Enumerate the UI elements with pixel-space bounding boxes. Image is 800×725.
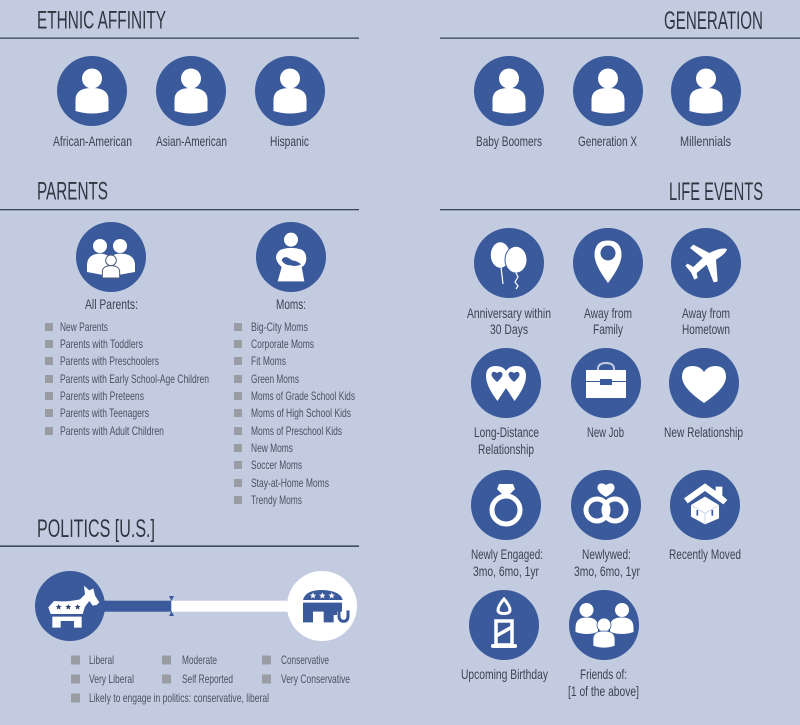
legend: politics options: Self Reported (182, 672, 233, 686)
list: moms: Trendy Moms (251, 493, 302, 507)
icon: wedding rings (571, 470, 641, 540)
legend: politics options: Very Liberal (89, 672, 134, 686)
label: Anniversary within 30 Days: Anniversary within (467, 305, 551, 321)
label: Away from Family: Family (593, 321, 623, 337)
label: Away from Family: Away from (584, 305, 632, 321)
legend: politics options: Liberal (89, 653, 114, 667)
icon: democrat donkey (35, 571, 105, 641)
label: Newly Engaged (471, 546, 543, 579)
label: Long-Distance Relationship: Long-Distance (474, 424, 539, 440)
legend: politics options (71, 653, 350, 705)
list: all parents: Parents with Teenagers (60, 406, 149, 420)
icon: map pin (573, 228, 643, 298)
icon: moms (256, 222, 326, 292)
label: Away from Hometown (682, 305, 730, 337)
icon: engagement ring (471, 470, 541, 540)
label: African-American: African-American (53, 133, 132, 149)
label: Millennials: Millennials (680, 133, 731, 149)
label: Friends of: Friends of: (580, 666, 627, 682)
list: moms: Stay-at-Home Moms (251, 476, 329, 490)
label: Friends of: [1 of the above] (568, 683, 639, 699)
icon: Millennials (671, 56, 741, 126)
label: Moms: Moms: (276, 296, 306, 312)
icon: balloons (474, 228, 544, 298)
section: ethnic affinity (0, 6, 359, 149)
list: all parents: Parents with Early School-Age Children (60, 372, 209, 386)
list: moms (234, 320, 355, 507)
label: New Relationship: New Relationship (664, 424, 743, 440)
label: Anniversary within 30 Days: 30 Days (490, 321, 528, 337)
legend: politics options: Conservative (281, 653, 329, 667)
label: Newly Engaged: Newly Engaged: (471, 546, 543, 562)
label: Recently Moved: Recently Moved (669, 546, 741, 562)
label: Long-Distance Relationship (474, 424, 539, 457)
list: all parents (45, 320, 209, 438)
icon: house with box (670, 470, 740, 540)
list: all parents: New Parents (60, 320, 108, 334)
list: moms: Fit Moms (251, 354, 286, 368)
list: all parents: Parents with Preteens (60, 389, 144, 403)
list: moms: Green Moms (251, 372, 299, 386)
label: Away from Hometown: Away from (682, 305, 730, 321)
label: Newlywed: Newlywed: (582, 546, 631, 562)
label: Hispanic: Hispanic (270, 133, 309, 149)
label: Newlywed (574, 546, 640, 579)
heading: ethnic affinity: ETHNIC AFFINITY (37, 6, 166, 34)
label: Long-Distance Relationship: Relationship (478, 441, 534, 457)
label: Baby Boomers: Baby Boomers (476, 133, 542, 149)
icon: republican elephant (287, 571, 357, 641)
icon: two pins with hearts (471, 348, 541, 418)
list: moms: Moms of High School Kids (251, 406, 351, 420)
list: all parents: Parents with Toddlers (60, 337, 143, 351)
icon: Generation X (573, 56, 643, 126)
icon: birthday candle (469, 590, 539, 660)
heading: politics: POLITICS [U.S.] (37, 515, 155, 543)
legend: politics options: Likely to engage in politics: conservative, liberal (89, 691, 269, 705)
slider: liberal to conservative (100, 596, 297, 616)
legend: politics options: Very Conservative (281, 672, 350, 686)
list: moms: New Moms (251, 441, 293, 455)
label: Friends of (568, 666, 639, 699)
section: parents (0, 178, 359, 507)
list: all parents: Parents with Preschoolers (60, 354, 159, 368)
icon: Hispanic (255, 56, 325, 126)
heading: parents: PARENTS (37, 178, 108, 206)
section: politics (0, 515, 359, 705)
list: moms: Corporate Moms (251, 337, 314, 351)
legend: politics options: Moderate (182, 653, 217, 667)
section: generation (440, 7, 800, 149)
icon: African-American (57, 56, 127, 126)
icon: all parents (76, 222, 146, 292)
label: Newly Engaged: 3mo, 6mo, 1yr (473, 563, 539, 579)
icon: Baby Boomers (474, 56, 544, 126)
list: moms: Soccer Moms (251, 458, 302, 472)
section: life events (440, 178, 800, 699)
list: moms: Moms of Preschool Kids (251, 424, 342, 438)
label: New Job: New Job (587, 424, 624, 440)
label: Upcoming Birthday: Upcoming Birthday (461, 666, 548, 682)
icon: airplane (671, 228, 741, 298)
label: Away from Hometown: Hometown (682, 321, 730, 337)
label: Asian-American: Asian-American (156, 133, 227, 149)
label: All Parents: All Parents: (85, 296, 138, 312)
icon: briefcase (571, 348, 641, 418)
icon: heart (669, 348, 739, 418)
list: moms: Moms of Grade School Kids (251, 389, 355, 403)
label: Anniversary within 30 Days (467, 305, 551, 337)
list: moms: Big-City Moms (251, 320, 308, 334)
icon: Asian-American (156, 56, 226, 126)
list: all parents: Parents with Adult Children (60, 424, 164, 438)
label: Away from Family (584, 305, 632, 337)
label: Generation X: Generation X (578, 133, 637, 149)
label: Newlywed: 3mo, 6mo, 1yr (574, 563, 640, 579)
icon: friends group (569, 590, 639, 660)
